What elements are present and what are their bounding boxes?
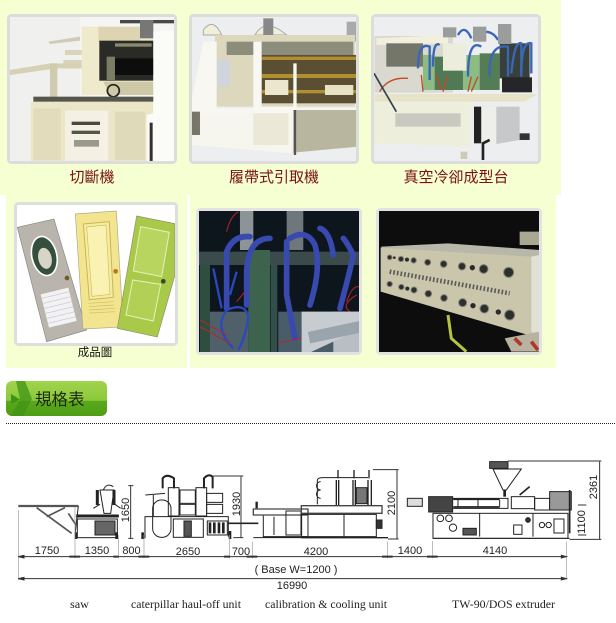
dimension: 1350: 1350 xyxy=(85,545,109,557)
photo: saw machine xyxy=(8,16,176,162)
dimension: saw height: 1650 xyxy=(120,498,132,522)
divider xyxy=(6,422,616,424)
photo: cooling hoses close-up xyxy=(198,210,363,354)
icon: chevron arrow xyxy=(11,381,32,416)
dimension: cooling unit height: 2100 xyxy=(386,491,398,515)
panel: top machines background xyxy=(0,0,561,195)
button: 規格表 xyxy=(6,381,107,416)
label: saw: saw xyxy=(70,597,89,611)
note: base width: ( Base W=1200 ) xyxy=(255,564,337,576)
dimension: total length: 16990 xyxy=(277,580,307,592)
dimension: 4200: 4200 xyxy=(304,546,328,558)
photo: vacuum calibration and cooling table xyxy=(372,16,540,162)
label: TW-90/DOS extruder: TW-90/DOS extruder xyxy=(452,597,555,611)
dimension: 4140: 4140 xyxy=(483,545,507,557)
dimension lines right xyxy=(308,461,601,580)
dimension: center height: 1100 xyxy=(576,510,588,534)
photo: die head close-up xyxy=(378,210,541,354)
dimension: haul-off height: 1930 xyxy=(231,492,243,516)
dimension: 2650: 2650 xyxy=(176,546,200,558)
dimension: 700: 700 xyxy=(232,546,250,558)
machine: calibration and cooling unit xyxy=(253,470,388,538)
photo: caterpillar haul-off machine xyxy=(190,16,367,162)
dimension: 1400: 1400 xyxy=(398,545,422,557)
photo: finished doors xyxy=(16,204,176,344)
dimension: extruder height: 2361 xyxy=(588,475,600,499)
button label: 規格表 xyxy=(35,390,84,409)
dimension: 1750: 1750 xyxy=(35,545,59,557)
caption: 真空冷卻成型台: 真空冷卻成型台 xyxy=(403,168,509,186)
dimension: 800: 800 xyxy=(122,545,141,557)
panel: finished products background xyxy=(6,195,187,368)
label: calibration and cooling unit: calibration & cooling unit xyxy=(265,597,388,611)
icon: small triangle xyxy=(11,394,20,404)
panel: detail photos background xyxy=(190,195,556,368)
machine: saw xyxy=(18,485,121,539)
machine: TW-90/DOS extruder xyxy=(407,462,571,538)
caption: 履帶式引取機: 履帶式引取機 xyxy=(229,169,319,186)
machine: caterpillar haul-off unit xyxy=(143,475,258,539)
caption: 成品圖: 成品圖 xyxy=(78,346,112,359)
chart: extrusion line layout drawing xyxy=(18,461,601,611)
caption: 切斷機: 切斷機 xyxy=(69,169,115,186)
dimension lines xyxy=(18,476,308,580)
label: caterpillar haul-off unit: caterpillar haul-off unit xyxy=(131,597,242,611)
